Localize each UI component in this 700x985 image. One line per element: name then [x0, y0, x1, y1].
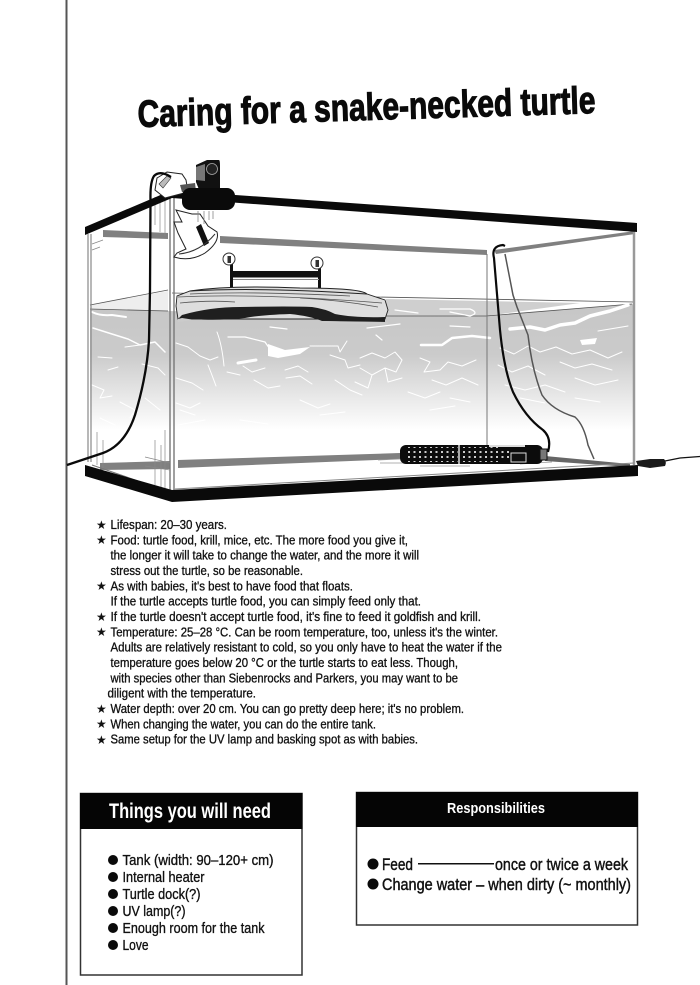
note stars: ★ — [96, 717, 107, 731]
note lines: If the turtle doesn't accept turtle food, it's fine to feed it goldfish and krill. — [110, 609, 481, 624]
panel: things you will need — [80, 793, 302, 975]
checklist: Enough room for the tank — [122, 920, 265, 937]
panel heading: Things you will need — [109, 800, 271, 823]
note lines: Temperature: 25–28 °C. Can be room temperature, too, unless it's the winter. — [110, 624, 498, 639]
feed row: Feed — [382, 855, 413, 874]
feed row: once or twice a week — [495, 855, 628, 874]
checklist: Tank (width: 90–120+ cm) — [122, 852, 274, 869]
feed row — [368, 855, 628, 874]
page border line — [66, 0, 68, 985]
care notes — [96, 517, 502, 747]
note stars: ★ — [96, 610, 107, 624]
note stars — [96, 518, 107, 747]
ramp with suction cups — [223, 253, 323, 288]
checklist — [108, 852, 274, 954]
note lines: Food: turtle food, krill, mice, etc. The more food you give it, — [110, 532, 408, 547]
note stars: ★ — [96, 579, 107, 593]
note lines: Same setup for the UV lamp and basking spot as with babies. — [110, 732, 418, 747]
note lines: diligent with the temperature. — [108, 686, 256, 701]
note lines: Lifespan: 20–30 years. — [110, 517, 227, 532]
heater power cord — [493, 245, 549, 452]
aquarium illustration — [67, 160, 700, 502]
lamp power cord — [67, 173, 171, 465]
checklist: Love — [122, 937, 148, 954]
note lines — [108, 517, 502, 747]
tank bottom black frame — [85, 465, 638, 502]
tank top black frame — [85, 191, 637, 235]
water body — [90, 290, 634, 430]
checklist: UV lamp(?) — [122, 903, 186, 920]
heater — [400, 445, 547, 464]
note lines: the longer it will take to change the water, and the more it will — [110, 548, 419, 563]
plug and external cord — [636, 456, 700, 468]
checklist: Turtle dock(?) — [122, 886, 200, 903]
tank back and side rails — [88, 194, 635, 492]
panel heading: Responsibilities — [447, 800, 545, 817]
note stars: ★ — [96, 733, 107, 747]
note stars: ★ — [96, 702, 107, 716]
change water row: Change water – when dirty (~ monthly) — [382, 875, 631, 894]
floating turtle dock — [176, 287, 388, 325]
clamp lamp — [155, 160, 235, 259]
note lines: Adults are relatively resistant to cold, so you only have to heat the water if the — [110, 640, 502, 655]
note lines: If the turtle accepts turtle food, you can simply feed only that. — [110, 594, 421, 609]
note lines: temperature goes below 20 °C or the turtle starts to eat less. Though, — [110, 655, 458, 670]
note stars: ★ — [96, 533, 107, 547]
note lines: Water depth: over 20 cm. You can go pretty deep here; it's no problem. — [110, 701, 464, 716]
note lines: As with babies, it's best to have food that floats. — [110, 578, 353, 593]
water caustics — [92, 305, 628, 425]
note stars: ★ — [96, 625, 107, 639]
panel: responsibilities — [356, 792, 638, 925]
note lines: with species other than Siebenrocks and Parkers, you may want to be — [110, 670, 458, 685]
second cord in reflection — [505, 254, 594, 459]
note stars: ★ — [96, 518, 107, 532]
checklist: Internal heater — [122, 869, 205, 886]
note lines: When changing the water, you can do the entire tank. — [110, 716, 376, 731]
note lines: stress out the turtle, so be reasonable. — [110, 563, 303, 578]
